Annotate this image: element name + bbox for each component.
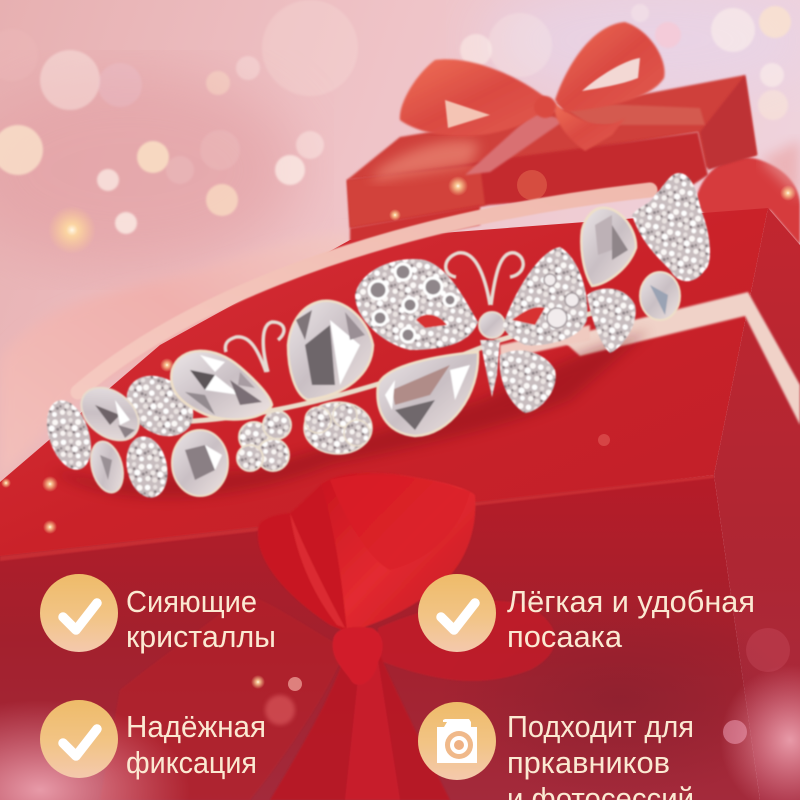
far right pave xyxy=(632,173,710,281)
feature 1: shining crystals xyxy=(40,574,276,654)
box right face xyxy=(714,208,800,800)
box front face xyxy=(0,475,760,800)
pale ribbon highlights xyxy=(500,325,590,360)
silk drape on the left xyxy=(0,232,350,480)
pave cluster: circles 1 xyxy=(237,411,291,471)
pave wing: left upper xyxy=(115,363,205,449)
body crystal xyxy=(479,312,505,338)
text: for holidays: пркавников xyxy=(507,745,670,780)
big satin bow xyxy=(100,473,555,800)
sparkles xyxy=(1,176,796,725)
gem: teardrop horizontal xyxy=(171,351,272,419)
gem: left teardrop xyxy=(71,377,149,451)
lid top xyxy=(347,75,757,180)
big gift box xyxy=(0,190,800,800)
lid front xyxy=(347,132,708,228)
text: shining crystals: кристаллы xyxy=(126,619,276,654)
bow right loop xyxy=(555,22,665,112)
bokeh fog over the bottom xyxy=(440,600,800,800)
pave wing: mid right xyxy=(587,288,636,353)
tiara with butterflies xyxy=(39,173,710,501)
pale ribbon on box xyxy=(560,292,800,425)
crystal accents on wing xyxy=(369,264,456,342)
antennae xyxy=(225,253,523,372)
gem: oval small lower xyxy=(172,430,228,496)
bow ribbon tails xyxy=(465,112,565,175)
gem: right oval xyxy=(640,272,680,320)
box top face xyxy=(0,208,768,560)
butterfly body xyxy=(480,340,500,397)
gem: big oval lower xyxy=(377,352,478,436)
crystal accents right wing xyxy=(544,274,579,328)
gem: right teardrop xyxy=(581,208,636,286)
red ribbon behind on the right xyxy=(695,157,800,245)
pave wing: left lower xyxy=(121,433,173,501)
icon: check badge 3 xyxy=(40,700,118,778)
feature 4: for holidays and photo shoots xyxy=(418,702,694,800)
small gift box in the back xyxy=(347,22,800,250)
headband loop behind tiara xyxy=(78,190,650,392)
icon: check badge 1 xyxy=(40,574,118,652)
text: for holidays: Подходит для xyxy=(507,709,694,744)
bottom pink bokeh xyxy=(0,628,800,800)
feature 3: reliable fixation xyxy=(40,700,266,780)
text: shining crystals: Сияющие xyxy=(126,584,257,619)
butterfly wing: right upper xyxy=(503,247,587,345)
icon: camera badge xyxy=(418,702,496,780)
butterfly wing: large upper left xyxy=(355,259,478,350)
text: for holidays xyxy=(507,709,694,800)
metal frame xyxy=(110,305,620,422)
tails xyxy=(270,655,450,800)
top satin loop xyxy=(321,473,475,632)
lower left loop xyxy=(100,596,345,800)
gem: left small xyxy=(86,438,128,496)
feature 2: light and comfortable fit xyxy=(418,574,755,654)
bow left loop xyxy=(400,59,555,136)
tiara shadow on box xyxy=(50,330,650,498)
text: shining crystals xyxy=(126,584,276,654)
box base strip xyxy=(350,205,480,250)
text: light fit xyxy=(507,584,755,654)
pave cluster: circles 2 xyxy=(304,402,372,454)
text: reliable fixation: Надёжная xyxy=(126,709,266,744)
pave wing: left far xyxy=(39,395,99,475)
knot xyxy=(333,627,383,685)
icon: check badge 2 xyxy=(418,574,496,652)
text: reliable fixation xyxy=(126,709,266,780)
butterfly wing: right lower xyxy=(500,350,556,413)
lower right loop xyxy=(378,601,555,681)
text: light fit: Лёгкая и удобная xyxy=(507,584,755,619)
gem: teardrop vertical xyxy=(288,301,373,400)
text: reliable fixation: фиксация xyxy=(126,745,257,780)
text: light fit: посаака xyxy=(507,619,623,654)
